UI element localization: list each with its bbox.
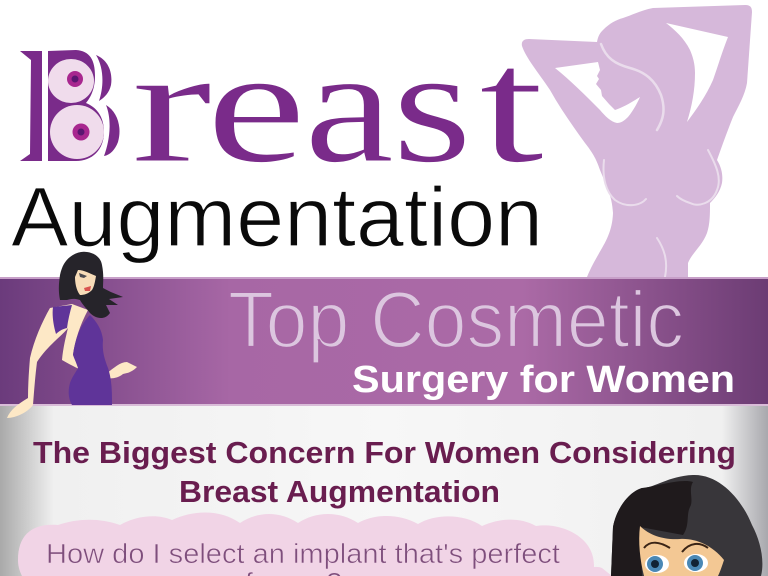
- face: [75, 270, 96, 295]
- title: Augmentation: Augmentation: [11, 170, 543, 264]
- heading: biggest concern: The Biggest Concern For Women Considering: [33, 435, 736, 470]
- heading: biggest concern: Breast Augmentation: [179, 474, 500, 509]
- face: [639, 526, 724, 576]
- heading: biggest concern: [33, 435, 736, 509]
- purple band: [0, 277, 768, 406]
- title: Breast: t: [479, 14, 544, 197]
- eyebrows: [644, 543, 708, 552]
- dress: [53, 305, 112, 405]
- band heading: Top Cosmetic: Top Cosmetic: [228, 275, 684, 364]
- title: Breast: e: [206, 14, 306, 197]
- title: Breast: B: [20, 12, 120, 198]
- silhouette: woman with raised arms: [522, 5, 752, 277]
- hair: [59, 252, 123, 318]
- title: Breast: [16, 12, 544, 198]
- decorated B: stem and bowls: [16, 46, 124, 166]
- left eye: [645, 555, 669, 573]
- illustration: woman with black bob: [611, 475, 762, 576]
- band heading: Surgery for Women: Surgery for Women: [352, 359, 735, 401]
- lower section background: [0, 406, 768, 576]
- question text: How do I select an implant that's perfect: [46, 538, 560, 569]
- arms and back: [7, 304, 137, 418]
- icon: lower breast: [50, 105, 104, 159]
- hair: [611, 475, 762, 576]
- illustration: woman in purple dress: [7, 252, 137, 418]
- icon: upper breast: [48, 59, 94, 103]
- right eye: [684, 554, 708, 572]
- question cloud: [18, 512, 612, 576]
- title: Breast: a: [304, 15, 394, 198]
- title: Breast: s: [392, 15, 472, 197]
- title: Breast: r: [131, 15, 212, 197]
